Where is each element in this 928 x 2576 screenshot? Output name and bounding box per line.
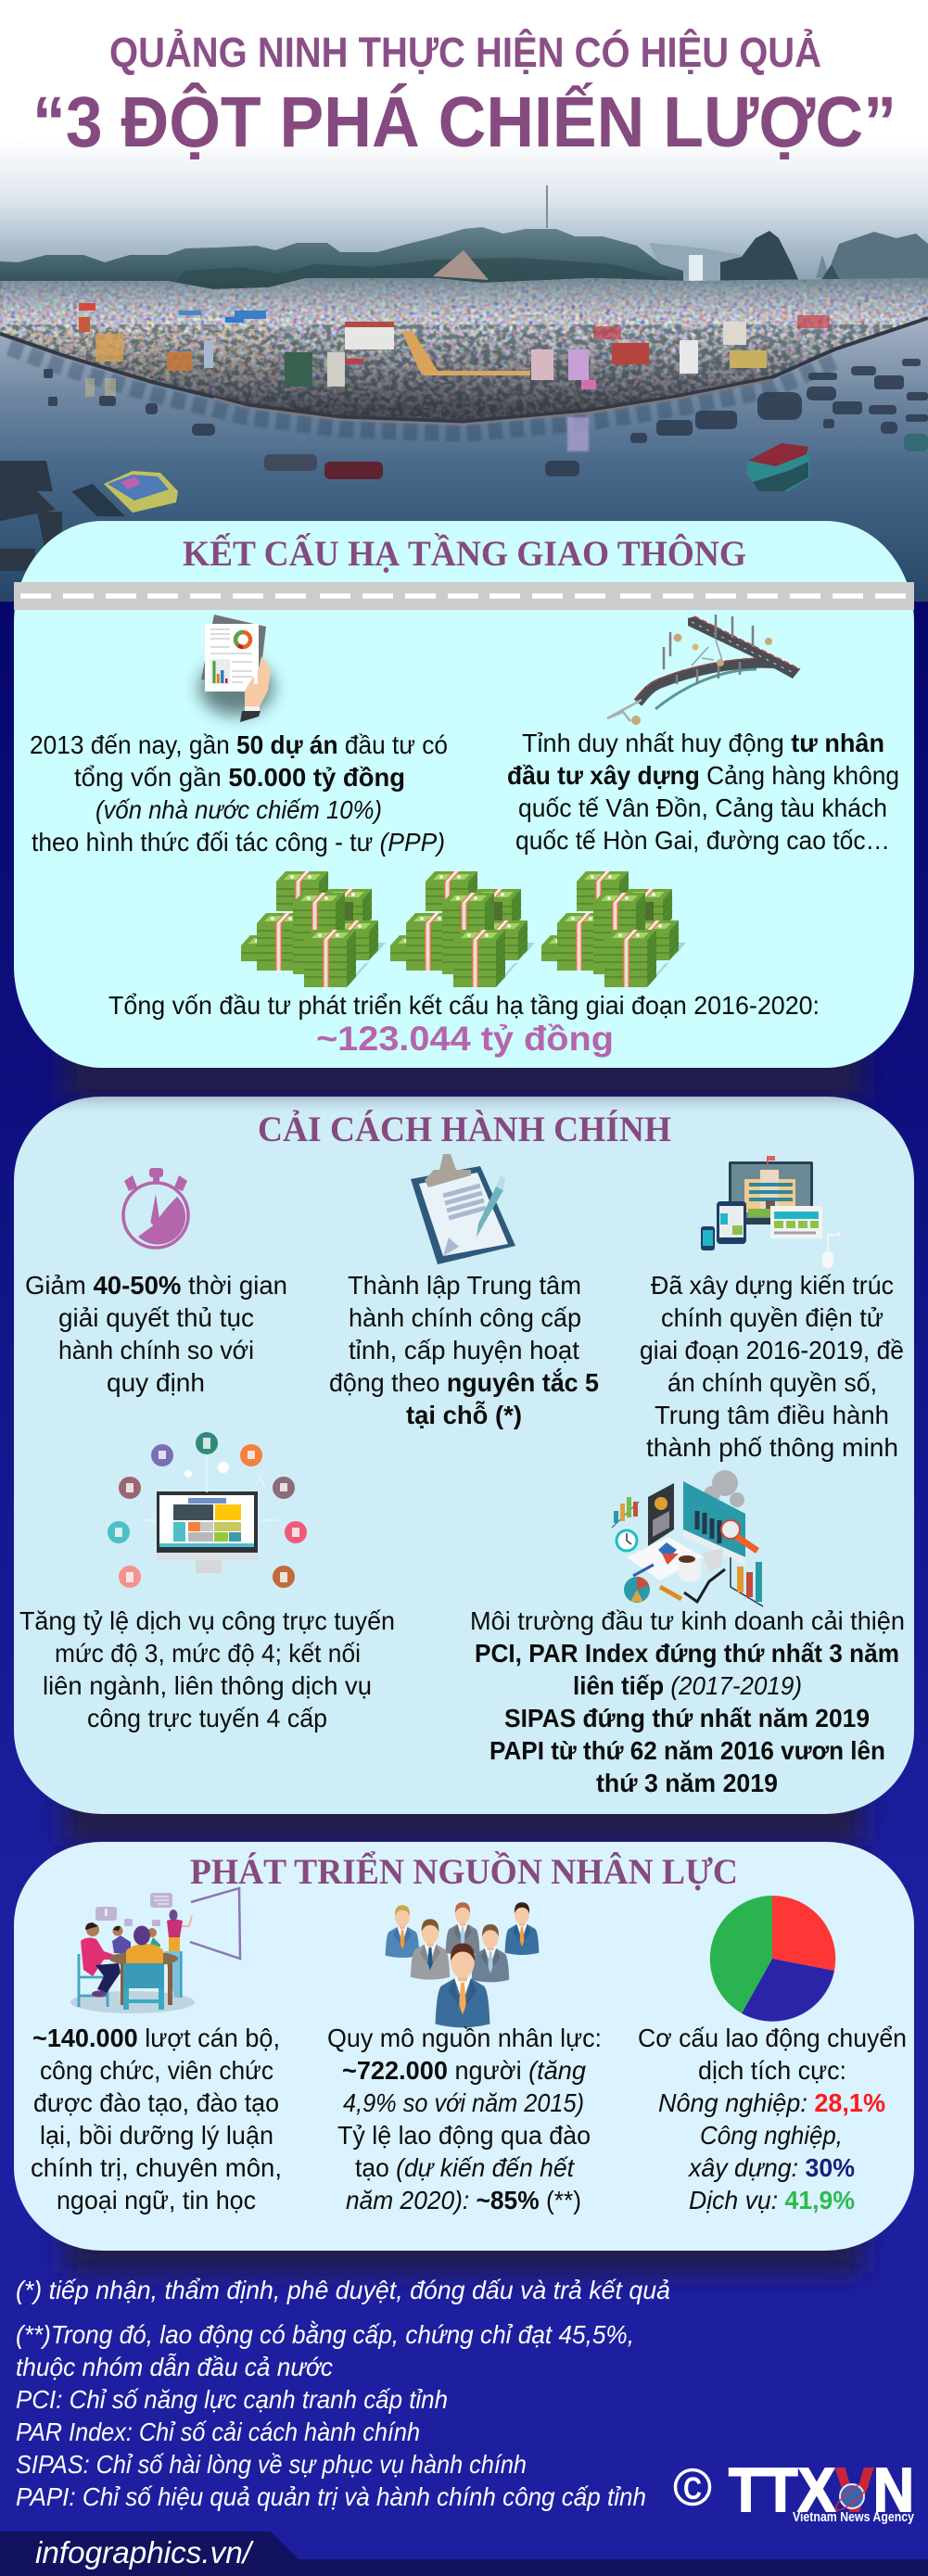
text: private investment: quốc tế Vân Đồn, Cảng tàu khách bbox=[518, 793, 887, 822]
text: officials trained: lại, bồi dưỡng lý luận bbox=[40, 2121, 273, 2150]
text: public administration center: động theo nguyên tắc 5 bbox=[329, 1368, 599, 1397]
icon: workforce group bbox=[386, 1902, 539, 2027]
icon: report in hand bbox=[199, 615, 273, 722]
text: business environment rankings: thứ 3 năm 2019 bbox=[596, 1769, 778, 1797]
text: officials trained: ngoại ngữ, tin học bbox=[57, 2186, 256, 2214]
footnotes: (*) tiếp nhận, thẩm định, phê duyệt, đóng dấu và trả kết quả bbox=[16, 2276, 670, 2304]
text: workforce size: ~722.000 người (tăng bbox=[342, 2056, 586, 2085]
figure: total capital: ~123.044 tỷ đồng bbox=[316, 1020, 614, 1058]
icon: bridge bbox=[607, 615, 800, 725]
text: business environment rankings: liên tiếp (2017-2019) bbox=[573, 1671, 802, 1700]
text: workforce size bbox=[327, 2024, 602, 2214]
text: officials trained: ~140.000 lượt cán bộ, bbox=[32, 2024, 280, 2052]
text: business environment rankings: SIPAS đứng thứ nhất năm 2019 bbox=[504, 1704, 870, 1732]
title bbox=[32, 29, 896, 162]
icon: globe bbox=[833, 2479, 871, 2514]
text: PPP projects: tổng vốn gần 50.000 tỷ đồng bbox=[74, 763, 405, 792]
text: private investment: Tỉnh duy nhất huy động tư nhân bbox=[522, 729, 884, 757]
text: private investment: đầu tư xây dựng Cảng hàng không bbox=[507, 761, 899, 790]
text: workforce size: 4,9% so với năm 2015) bbox=[343, 2088, 584, 2117]
text: workforce size: năm 2020): ~85% (**) bbox=[346, 2186, 581, 2214]
text: processing time: Giảm 40-50% thời gian bbox=[25, 1271, 287, 1300]
text: processing time bbox=[25, 1271, 287, 1397]
text: e-government: thành phố thông minh bbox=[646, 1433, 898, 1462]
text: online public services: mức độ 3, mức độ 4; kết nối bbox=[55, 1639, 361, 1668]
text: e-government: chính quyền điện tử bbox=[661, 1303, 884, 1332]
text: business environment rankings: PAPI từ thứ 62 năm 2016 vươn lên bbox=[489, 1736, 885, 1765]
icon: money stacks 3 bbox=[541, 871, 686, 987]
icon: e-government devices bbox=[701, 1156, 839, 1268]
text: PPP projects bbox=[30, 730, 448, 857]
text: e-government: Đã xây dựng kiến trúc bbox=[651, 1271, 894, 1300]
text: PPP projects: theo hình thức đối tác công - tư (PPP) bbox=[32, 828, 445, 857]
text: private investment bbox=[507, 729, 899, 855]
icon: clipboard bbox=[411, 1154, 515, 1264]
text: labour structure: Dịch vụ: 41,9% bbox=[689, 2186, 855, 2214]
text: officials trained: chính trị, chuyên môn, bbox=[31, 2153, 282, 2182]
text: workforce size: Tỷ lệ lao động qua đào bbox=[337, 2121, 591, 2150]
footnotes: PAPI: Chỉ số hiệu quả quản trị và hành chính công cấp tỉnh bbox=[16, 2482, 646, 2511]
panel: human resources bbox=[14, 1842, 914, 2251]
text: online public services bbox=[19, 1606, 395, 1732]
pie chart: labour structure bbox=[710, 1896, 835, 2022]
text: public administration center bbox=[329, 1271, 599, 1429]
text: business environment rankings bbox=[470, 1606, 905, 1797]
title line 1: QUẢNG NINH THỰC HIỆN CÓ HIỆU QUẢ bbox=[109, 29, 821, 76]
floating house right bbox=[746, 443, 810, 491]
text: public administration center: tỉnh, cấp huyện hoạt bbox=[349, 1336, 579, 1364]
text: processing time: quy định bbox=[107, 1368, 205, 1397]
text: e-government: án chính quyền số, bbox=[667, 1368, 877, 1397]
text: labour structure: Cơ cấu lao động chuyển bbox=[638, 2024, 907, 2052]
heading: human resources: PHÁT TRIỂN NGUỒN NHÂN LỰC bbox=[190, 1849, 738, 1892]
logo: copyright TTXVN: TTXVN bbox=[729, 2455, 914, 2525]
footnotes: (**)Trong đó, lao động có bằng cấp, chứng chỉ đạt 45,5%, bbox=[16, 2320, 634, 2349]
text: labour structure: xây dựng: 30% bbox=[687, 2153, 855, 2182]
text: business environment rankings: PCI, PAR Index đứng thứ nhất 3 năm bbox=[475, 1639, 899, 1668]
text: e-government: giai đoạn 2016-2019, đề bbox=[640, 1336, 904, 1364]
text: officials trained: được đào tạo, đào tạo bbox=[33, 2088, 279, 2117]
icon: training meeting bbox=[70, 1888, 240, 2013]
floating house left bbox=[71, 471, 178, 516]
text: e-government: Trung tâm điều hành bbox=[655, 1401, 889, 1429]
text: public administration center: Thành lập Trung tâm bbox=[348, 1271, 581, 1300]
icon: online services monitor bbox=[108, 1432, 307, 1588]
footnotes bbox=[16, 2276, 670, 2511]
footnotes: SIPAS: Chỉ số hài lòng về sự phục vụ hành chính bbox=[16, 2450, 527, 2479]
text: PPP projects: (vốn nhà nước chiếm 10%) bbox=[95, 795, 382, 824]
icon: business analytics bbox=[612, 1470, 763, 1606]
text: officials trained bbox=[31, 2024, 282, 2214]
hero photo: Ha Long city and bay bbox=[0, 0, 928, 602]
heading: administrative reform: CẢI CÁCH HÀNH CHÍNH bbox=[258, 1109, 671, 1149]
text: public administration center: hành chính công cấp bbox=[349, 1303, 581, 1332]
icon: money stacks 2 bbox=[390, 871, 535, 987]
text: labour structure: Công nghiệp, bbox=[700, 2121, 843, 2150]
card shadows bbox=[65, 1029, 862, 2273]
text: labour structure: dịch tích cực: bbox=[698, 2056, 846, 2085]
text: e-government bbox=[640, 1271, 904, 1462]
text: private investment: quốc tế Hòn Gai, đường cao tốc… bbox=[515, 826, 890, 855]
text: online public services: công trực tuyến 4 cấp bbox=[87, 1704, 327, 1732]
text: total investment: Tổng vốn đầu tư phát triển kết cấu hạ tầng giai đoạn 2016-2020: bbox=[108, 991, 820, 1020]
footnotes: thuộc nhóm dẫn đầu cả nước bbox=[16, 2353, 333, 2381]
panel: administrative reform bbox=[14, 1097, 914, 1814]
panel: transport infrastructure bbox=[14, 521, 914, 1068]
text: PPP projects: 2013 đến nay, gần 50 dự án đầu tư có bbox=[30, 730, 448, 759]
footnotes: PAR Index: Chỉ số cải cách hành chính bbox=[16, 2417, 420, 2446]
text: processing time: giải quyết thủ tục bbox=[58, 1303, 254, 1332]
icon: copyright mark: C bbox=[683, 2471, 702, 2506]
text: workforce size: Quy mô nguồn nhân lực: bbox=[327, 2024, 602, 2052]
road divider bbox=[14, 582, 914, 610]
icon: money stacks 1 bbox=[241, 871, 386, 987]
footnotes: PCI: Chỉ số năng lực cạnh tranh cấp tỉnh bbox=[16, 2385, 448, 2414]
icon: copyright mark bbox=[675, 2469, 710, 2506]
footer band bbox=[0, 2532, 928, 2576]
website address: infographics.vn/ bbox=[35, 2535, 254, 2570]
text: labour structure bbox=[638, 2024, 907, 2214]
text: online public services: liên ngành, liên thông dịch vụ bbox=[43, 1671, 372, 1700]
text: officials trained: công chức, viên chức bbox=[40, 2056, 273, 2085]
icon: stopwatch bbox=[123, 1168, 188, 1248]
heading: infrastructure: KẾT CẤU HẠ TẦNG GIAO THÔNG bbox=[183, 532, 746, 574]
text: processing time: hành chính so với bbox=[58, 1336, 254, 1364]
text: labour structure: Nông nghiệp: 28,1% bbox=[658, 2088, 885, 2117]
text: public administration center: tại chỗ (*) bbox=[406, 1401, 522, 1429]
text: online public services: Tăng tỷ lệ dịch vụ công trực tuyến bbox=[19, 1606, 395, 1635]
text: business environment rankings: Môi trường đầu tư kinh doanh cải thiện bbox=[470, 1606, 905, 1635]
text: workforce size: tạo (dự kiến đến hết bbox=[355, 2153, 575, 2182]
